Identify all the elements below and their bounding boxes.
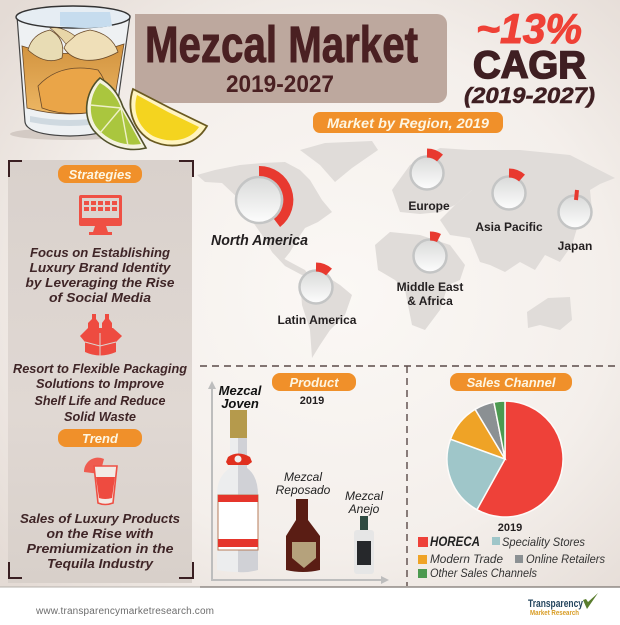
label: Middle East and Africa: & Africa — [407, 294, 453, 308]
heading: strategies — [58, 165, 142, 183]
product year: 2019 — [300, 395, 324, 407]
chart axes — [212, 388, 384, 580]
world map — [197, 141, 615, 358]
heading: sales channel — [450, 373, 572, 391]
bottle: mezcal anejo — [354, 516, 374, 574]
icon: monitor — [79, 195, 122, 235]
donut: Latin America — [278, 267, 357, 327]
icon: cocktail glass — [84, 458, 117, 504]
icon: lime wedge — [87, 78, 146, 149]
text: social media strategy: Luxury Brand Identity — [30, 261, 172, 275]
CAGR callout — [464, 5, 595, 108]
panel: product — [208, 373, 389, 584]
icon: lemon wedge — [130, 89, 207, 146]
text: packaging strategy: Solutions to Improve — [36, 377, 164, 391]
label: mezcal joven: Joven — [221, 396, 259, 411]
donut: Europe — [408, 153, 450, 213]
legend: Online Retailers — [526, 552, 605, 566]
text: trend description: Sales of Luxury Products — [20, 511, 180, 526]
icon: box with bottles — [80, 314, 122, 356]
label: Europe: Europe — [408, 199, 450, 213]
text: trend description: on the Rise with — [46, 526, 154, 541]
heading: market by region: Market by Region, 2019 — [327, 115, 489, 131]
CAGR percentage: ~13% — [476, 5, 582, 52]
title banner — [135, 14, 447, 103]
label: North America: North America — [211, 232, 308, 249]
text: social media strategy — [26, 246, 175, 305]
legend: Modern Trade — [430, 552, 503, 566]
label: mezcal anejo: Anejo — [348, 502, 380, 516]
text: packaging strategy: Solid Waste — [64, 410, 136, 424]
text: social media strategy: of Social Media — [49, 291, 151, 305]
panel: strategies and trend — [8, 160, 193, 583]
donut: Middle East and Africa — [397, 236, 463, 308]
logo: Transparency — [528, 598, 584, 610]
label: Latin America: Latin America — [278, 313, 357, 327]
text: trend description: Tequila Industry — [47, 556, 154, 571]
text: trend description: Premiumization in the — [26, 541, 174, 556]
footer url: www.transparencymarketresearch.com — [35, 606, 214, 617]
logo tick — [583, 593, 598, 609]
legend: HORECA — [430, 534, 480, 549]
label: Japan: Japan — [558, 239, 592, 253]
heading: trend — [58, 429, 142, 447]
heading: sales channel: Sales Channel — [467, 375, 556, 390]
heading: market by region — [313, 112, 503, 133]
heading: product: Product — [289, 375, 339, 390]
label: mezcal reposado: Reposado — [276, 483, 331, 497]
donut: North America — [211, 171, 308, 249]
heading: strategies: Strategies — [69, 167, 131, 182]
pie year: 2019 — [498, 522, 522, 534]
legend: Speciality Stores — [502, 535, 585, 549]
label: mezcal joven: Mezcal — [219, 383, 262, 398]
bottle: mezcal joven — [217, 410, 258, 572]
CAGR word: CAGR — [473, 44, 586, 87]
legend: Other Sales Channels — [430, 566, 537, 580]
CAGR period: (2019-2027) — [464, 83, 595, 108]
bottle: mezcal reposado — [286, 499, 320, 572]
illustration: whisky glass with citrus — [10, 6, 207, 149]
text: social media strategy: by Leveraging the Rise — [26, 276, 175, 290]
text: trend description — [20, 511, 180, 571]
donut: Asia Pacific — [475, 173, 543, 234]
label: mezcal reposado: Mezcal — [284, 470, 322, 484]
legend — [418, 534, 605, 580]
text: packaging strategy: Shelf Life and Reduce — [34, 394, 166, 408]
title text: Mezcal Market — [145, 16, 418, 73]
label: Middle East and Africa: Middle East — [397, 280, 463, 294]
pie chart — [447, 401, 563, 517]
label: mezcal anejo: Mezcal — [345, 489, 383, 503]
text: packaging strategy: Resort to Flexible Packaging — [13, 362, 187, 376]
logo subtitle: Market Research — [530, 608, 579, 617]
heading: trend: Trend — [82, 431, 119, 446]
panel: sales channel — [418, 373, 605, 580]
text: social media strategy: Focus on Establishing — [30, 246, 170, 260]
text: packaging strategy — [13, 362, 187, 424]
donut: Japan — [558, 190, 592, 253]
title years: 2019-2027 — [226, 71, 334, 98]
logo — [528, 593, 598, 617]
label: Asia Pacific: Asia Pacific — [475, 220, 543, 234]
heading: product — [272, 373, 356, 391]
